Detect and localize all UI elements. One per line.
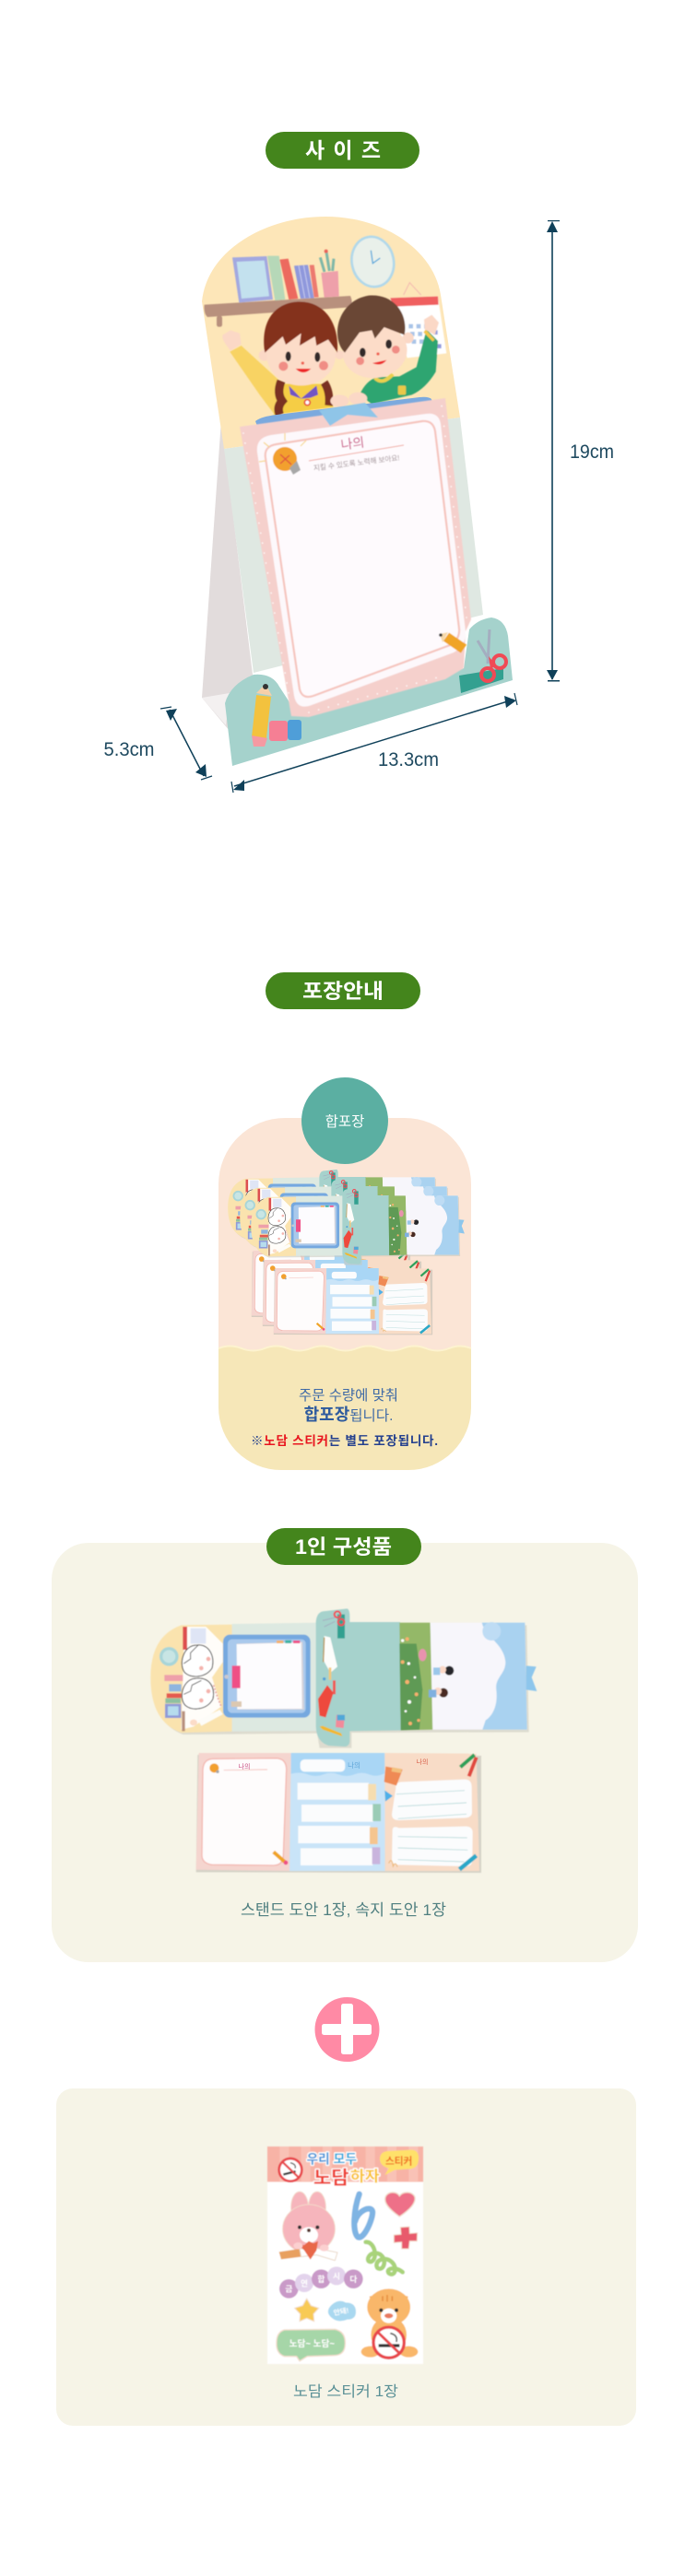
stand base	[225, 618, 513, 766]
icon: yellow pencil	[252, 684, 272, 747]
packaging stack: middle stand flat	[240, 1179, 454, 1256]
panel: contents per person	[52, 1543, 638, 1962]
arrow: width	[231, 693, 517, 793]
sheet titles: 나의	[348, 1760, 360, 1770]
packaging stack: back sheet	[252, 1251, 410, 1317]
label: height 19cm: 19cm	[570, 441, 614, 463]
sticker: heart	[385, 2193, 415, 2217]
sticker: green spring	[366, 2242, 403, 2275]
badge: combined packaging: 합포장	[325, 1113, 364, 1130]
caption: stand and sheet: 스탠드 도안 1장, 속지 도안 1장	[241, 1901, 446, 1919]
icon: light bulb	[259, 433, 306, 475]
icon: no smoking	[279, 2158, 301, 2182]
sheet titles: 나의	[239, 1762, 250, 1770]
sticker: purple circles: 금	[285, 2285, 292, 2294]
packaging stack: front sheet	[274, 1268, 432, 1335]
memo sheet on stand	[240, 398, 471, 717]
paper clip band and ribbon tab	[255, 397, 433, 429]
sticker: cloud: 안돼!	[333, 2305, 349, 2317]
sticker: star	[295, 2299, 319, 2322]
label: width 13.3cm: 13.3cm	[378, 749, 439, 770]
sheet titles	[239, 1758, 428, 1770]
sticker title: 노담	[313, 2167, 349, 2188]
product photo: desk stand	[202, 217, 513, 766]
packaging stack: middle sheet	[263, 1260, 421, 1326]
caption: sticker: 노담 스티커 1장	[293, 2383, 398, 2400]
memo title: 나의	[340, 435, 365, 453]
heading pill: contents	[266, 1528, 421, 1565]
stand flat template	[150, 1608, 537, 1748]
heading pill: contents: 1인 구성품	[295, 1535, 392, 1559]
sticker title: 모두	[334, 2152, 357, 2167]
label: depth 5.3cm: 5.3cm	[103, 739, 155, 760]
sticker: purple circles: 합	[317, 2274, 325, 2284]
sticker: rabbit	[279, 2192, 337, 2261]
sticker: cat with sign	[361, 2288, 418, 2358]
icon: plus	[315, 1997, 380, 2062]
icon: small pencil	[439, 632, 464, 649]
sticker title: 하자	[350, 2169, 380, 2185]
arrow: depth	[160, 707, 212, 780]
sheet titles: 나의	[417, 1758, 428, 1766]
heading pill: size: 사 이 즈	[305, 138, 381, 162]
heading pill: packaging	[266, 972, 420, 1009]
packaging stack: front stand flat	[251, 1188, 465, 1265]
heading pill: packaging: 포장안내	[302, 980, 384, 1003]
arrow: height	[547, 220, 560, 682]
badge: combined packaging	[301, 1077, 388, 1164]
packaging stack: back stand flat	[228, 1170, 442, 1247]
sticker badge	[380, 2150, 419, 2175]
sticker: purple circles: 다	[349, 2274, 357, 2284]
sticker: blue squiggle	[354, 2194, 372, 2238]
icon: ruler and scissors	[459, 629, 506, 693]
panel: sticker	[56, 2088, 636, 2426]
packaging caption: 주문 수량에 맞춰	[299, 1387, 398, 1404]
sticker: red plus	[394, 2227, 418, 2249]
sticker: cloud	[328, 2301, 356, 2321]
heading pill: size	[266, 132, 419, 169]
illustration: children and classroom wall	[204, 233, 446, 415]
sticker sheet	[267, 2147, 423, 2364]
sticker badge: 스티커	[385, 2157, 412, 2168]
caption area with wavy top	[218, 1346, 471, 1470]
sticker title	[307, 2151, 380, 2188]
sticker note: ※노담 스티커는 별도 포장됩니다.	[251, 1434, 438, 1448]
sticker: purple circles	[279, 2266, 363, 2299]
sticker title: 우리	[307, 2151, 330, 2167]
memo subtitle: 지킬 수 있도록 노력해 보아요!	[313, 453, 400, 473]
sticker: speech bubble	[277, 2329, 345, 2361]
sticker: purple circles: 시	[333, 2272, 340, 2281]
sticker: purple circles: 연	[301, 2277, 308, 2288]
icon: eraser	[269, 720, 301, 741]
packaging caption emphasis: 합포장됩니다.	[304, 1406, 393, 1424]
panel: packaging	[218, 1118, 471, 1470]
sticker: speech bubble: 노담~ 노담~	[289, 2338, 335, 2349]
sheet flat template	[196, 1753, 481, 1873]
